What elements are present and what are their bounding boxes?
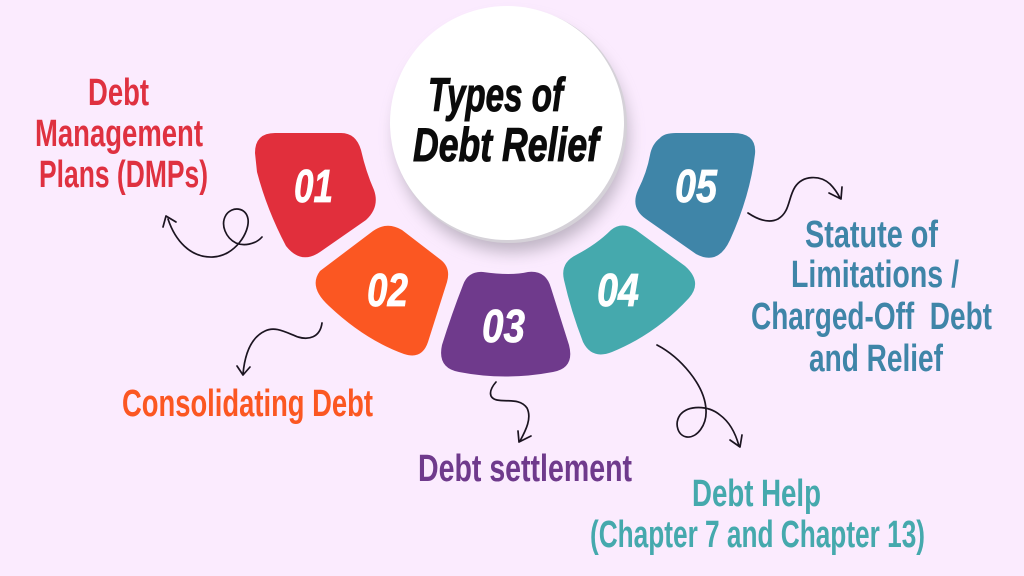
panel 03: 03	[482, 300, 525, 352]
panel 02: 02	[367, 264, 408, 316]
label 05: and Relief	[809, 338, 943, 380]
arrow 01	[163, 209, 262, 257]
label 01: Management	[35, 113, 203, 155]
panel 01	[255, 133, 376, 257]
label 02: Consolidating Debt	[122, 383, 373, 425]
panel 02	[316, 226, 448, 356]
arrow 05	[748, 178, 842, 221]
panel 03	[441, 272, 570, 376]
label 05: Statute of	[805, 214, 938, 256]
arrow 02	[237, 323, 322, 375]
label 01: Debt	[88, 72, 149, 114]
label 03: Debt settlement	[418, 448, 632, 490]
label 04	[590, 473, 925, 556]
label 01: Plans (DMPs)	[39, 154, 208, 196]
title	[413, 68, 602, 171]
panel 04	[563, 226, 695, 354]
panel 04: 04	[597, 264, 639, 316]
arrow 04	[657, 345, 742, 447]
panel 05: 05	[675, 160, 718, 212]
title: Debt Relief	[413, 118, 602, 171]
panel 01: 01	[294, 160, 333, 212]
arrow 03	[490, 382, 531, 442]
label 05: Limitations /	[791, 254, 959, 296]
label 04: Debt Help	[692, 473, 821, 515]
center circle with title	[390, 6, 628, 252]
panel 05	[635, 133, 755, 258]
label 01	[35, 72, 208, 196]
label 05	[751, 214, 992, 380]
title: Types of	[428, 68, 566, 121]
